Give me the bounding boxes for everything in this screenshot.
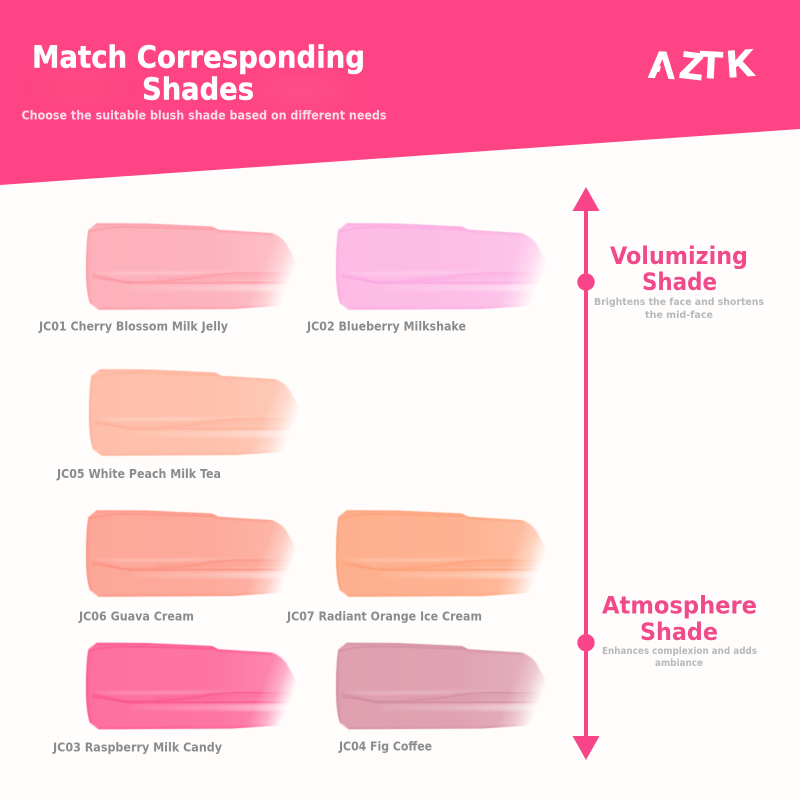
heading: Atmosphere Shade: Shade	[640, 618, 718, 646]
swatch: JC02	[336, 222, 549, 310]
swatch: JC07	[336, 510, 549, 598]
label: JC02: JC02 Blueberry Milkshake	[306, 318, 466, 334]
label: JC01: JC01 Cherry Blossom Milk Jelly	[38, 318, 228, 334]
swatch: JC06	[86, 510, 299, 598]
text: atmosphere description: ambiance	[655, 658, 703, 669]
label: JC07: JC07 Radiant Orange Ice Cream	[286, 608, 482, 624]
double-headed scale arrow	[572, 187, 600, 760]
heading: Volumizing Shade: Shade	[642, 268, 717, 296]
logo: AZTK: AZTK	[648, 42, 755, 88]
subtitle: Choose the suitable blush shade based on different needs	[22, 108, 386, 122]
header band	[0, 0, 800, 185]
text: atmosphere description	[602, 646, 757, 669]
label: JC06: JC06 Guava Cream	[78, 608, 194, 624]
heading: Atmosphere Shade: Atmosphere	[602, 592, 757, 620]
swatch: JC03	[86, 642, 299, 730]
swatch: JC04	[336, 642, 549, 730]
title: Match Corresponding	[32, 40, 365, 76]
heading: Atmosphere Shade	[602, 592, 757, 646]
text: volumizing description	[594, 297, 764, 321]
title: Shades	[142, 72, 254, 108]
text: volumizing description: Brightens the face and shortens	[594, 297, 764, 308]
heading: Volumizing Shade: Volumizing	[610, 242, 748, 270]
title	[32, 40, 365, 108]
label: JC05: JC05 White Peach Milk Tea	[56, 466, 221, 481]
swatch: JC01	[86, 222, 299, 310]
label: JC03: JC03 Raspberry Milk Candy	[52, 740, 222, 754]
swatch: JC05	[89, 368, 302, 456]
text: volumizing description: the mid-face	[645, 310, 713, 321]
label: JC04: JC04 Fig Coffee	[338, 738, 432, 754]
heading: Volumizing Shade	[610, 242, 748, 296]
text: atmosphere description: Enhances complexion and adds	[602, 646, 757, 657]
